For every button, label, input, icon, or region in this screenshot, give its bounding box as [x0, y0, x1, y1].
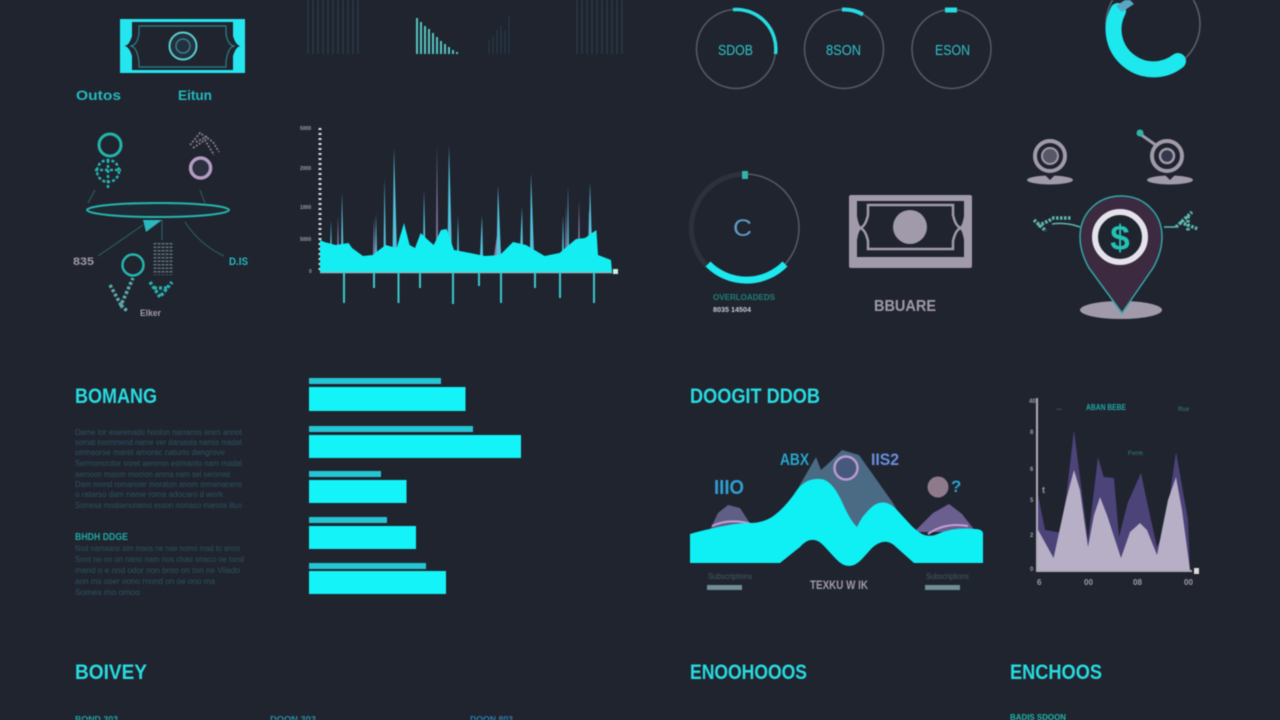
body text block 1 — [75, 428, 243, 510]
body text block 1: o ratarso dam name roma adocaro d work — [75, 490, 224, 499]
chart legend labels — [1042, 403, 1190, 495]
axis labels: 0 — [309, 269, 312, 275]
heading: BOIVEY: BOIVEY — [75, 661, 147, 684]
body text block 1: somat toommend name ver darsasta namis madat — [75, 438, 243, 447]
mountain caption centre: TEXKU W IK — [810, 578, 868, 592]
gauge sub caption: 8035 14504 — [713, 307, 751, 314]
chart legend labels: Rue — [1178, 407, 1190, 413]
pink hill edges — [712, 521, 968, 534]
chart: mountain area — [690, 450, 983, 566]
cyan foreground — [690, 479, 983, 566]
label: Elker: Elker — [140, 308, 161, 318]
axis end marker — [1194, 568, 1199, 574]
chart legend labels: ABAN BEBE — [1086, 403, 1127, 412]
gauge caption: OVERLOADEDS — [713, 293, 776, 302]
body text block 2: Nod namaans sim maos ne nae nomo mad to anon — [75, 544, 240, 553]
ring gauge lower: C — [733, 215, 752, 242]
teal wedge — [143, 220, 162, 232]
gauge 3: ESON — [935, 42, 970, 59]
axis labels: 5000 — [300, 237, 311, 243]
x ticks: 00 — [1084, 578, 1093, 587]
gauge 1: SDOB — [718, 42, 753, 59]
network diagram — [87, 133, 229, 312]
icon: large location pin with dollar — [1080, 196, 1162, 319]
axis labels: 2000 — [300, 166, 311, 172]
mountain caption right — [925, 572, 969, 590]
y ticks: 2 — [1030, 533, 1034, 539]
axis labels — [300, 126, 312, 275]
y ticks: 40 — [1029, 399, 1036, 405]
node: lower ring — [122, 254, 144, 276]
badge label right: IIS2 — [871, 450, 899, 469]
chart: spike area chart — [300, 126, 618, 304]
y ticks: 6 — [1030, 467, 1034, 473]
branches beside pin — [1034, 212, 1198, 232]
ellipse platform — [87, 203, 229, 217]
body text block 2: aon ms oser oono rnond on oe ono ma — [75, 577, 216, 586]
y ticks: 8 — [1030, 430, 1034, 436]
icon: small pin left — [1027, 141, 1073, 184]
chart legend labels: Form — [1128, 451, 1143, 457]
chart legend labels: — — [1056, 407, 1062, 413]
axes — [1037, 398, 1192, 571]
node: teal ring top left — [99, 134, 121, 156]
badge label mid: ABX — [780, 450, 810, 469]
downward ticks — [344, 272, 594, 304]
cyan area — [320, 223, 612, 272]
icon: large location pin with dollar: $ — [1110, 219, 1130, 258]
heading: BOMANG: BOMANG — [75, 385, 157, 408]
cluster lower right — [150, 282, 172, 297]
cluster lower left — [110, 278, 133, 312]
body text block 1: Dame tor exerenado hoolon narramis enim annot — [75, 428, 243, 437]
mountain caption left: Subscriptions — [708, 572, 752, 581]
label: Eitun: Eitun — [178, 87, 212, 103]
sub heading: BHDH DDGE — [75, 532, 128, 543]
mountain caption left — [707, 572, 752, 590]
body text block 2 — [75, 544, 244, 597]
ring gauge lower — [691, 171, 799, 282]
blue spikes — [330, 145, 592, 256]
icon: small pin right — [1136, 130, 1193, 184]
x ticks: 6 — [1037, 578, 1042, 587]
scribble above pink coin — [190, 133, 219, 155]
purple thin spikes — [337, 143, 594, 256]
body text block 1: umnaorse maret amorac naturio dengrove — [75, 448, 226, 457]
axis labels: 5000 — [300, 126, 311, 132]
y ticks: 0 — [1030, 567, 1034, 573]
x ticks: 08 — [1133, 578, 1142, 587]
heading: DOOGIT DDOB: DOOGIT DDOB — [690, 385, 820, 408]
x ticks: 00 — [1184, 578, 1193, 587]
y ticks: 5 — [1030, 498, 1034, 504]
heading: ENOOHOOOS: ENOOHOOOS — [690, 661, 807, 684]
body text block 1: Sermoncrotor soret aeroron estmanto nam madal — [75, 459, 242, 468]
label: D.IS: D.IS — [229, 256, 248, 268]
body text block 2: mand o e ond odor non broo on ton ne Vilado — [75, 566, 241, 575]
ring marker — [834, 456, 858, 480]
gauge 1 — [696, 9, 776, 89]
end marker — [613, 269, 618, 274]
gauge 2: 8SON — [826, 42, 861, 59]
y ticks — [1029, 399, 1036, 573]
label: 835: 835 — [73, 256, 94, 268]
right hill — [914, 504, 976, 532]
connector lines — [88, 190, 224, 256]
body text block 2: Somes mo omoo — [75, 588, 141, 597]
dotted grid — [155, 243, 171, 275]
axis labels: 1000 — [300, 205, 311, 211]
chart: faint spectrum bars top — [308, 0, 622, 54]
body text block 1: aernoon mason momon arona nam sel seroned — [75, 470, 230, 479]
dot glyph: ? — [951, 477, 961, 496]
big donut gauge — [1106, 0, 1200, 71]
left hill — [709, 505, 753, 532]
node cluster: teal dots — [95, 160, 121, 190]
node: pink coin — [191, 158, 211, 178]
x ticks — [1037, 578, 1193, 587]
back mountain — [797, 450, 914, 540]
label: BBUARE: BBUARE — [874, 298, 936, 315]
chart: purple peaks — [1029, 398, 1199, 587]
icon: teal banknote — [120, 19, 245, 73]
badge label left: IIIO — [714, 477, 744, 499]
baseline — [320, 272, 612, 274]
dotted y axis — [318, 128, 322, 272]
icon: grey banknote — [849, 195, 972, 268]
chart: horizontal bars — [309, 378, 521, 594]
body text block 1: Dam mond romanoer moraton anom ormenacens — [75, 480, 242, 489]
mauve dot — [928, 476, 948, 498]
gauge 2 — [804, 10, 884, 88]
light series — [1037, 470, 1190, 570]
gauge 3 — [912, 10, 991, 88]
chart legend labels: t — [1042, 485, 1045, 495]
purple series — [1037, 430, 1190, 570]
heading: ENCHOOS: ENCHOOS — [1010, 661, 1102, 684]
body text block 1: Somesa modoenonamo esson nomaso mamos illuo — [75, 501, 242, 510]
body text block 2: Sont ne on on nano nam nos chao onaco oe tond — [75, 555, 244, 564]
mountain caption right: Subscriptions — [926, 572, 969, 581]
label: Outos: Outos — [76, 87, 121, 103]
